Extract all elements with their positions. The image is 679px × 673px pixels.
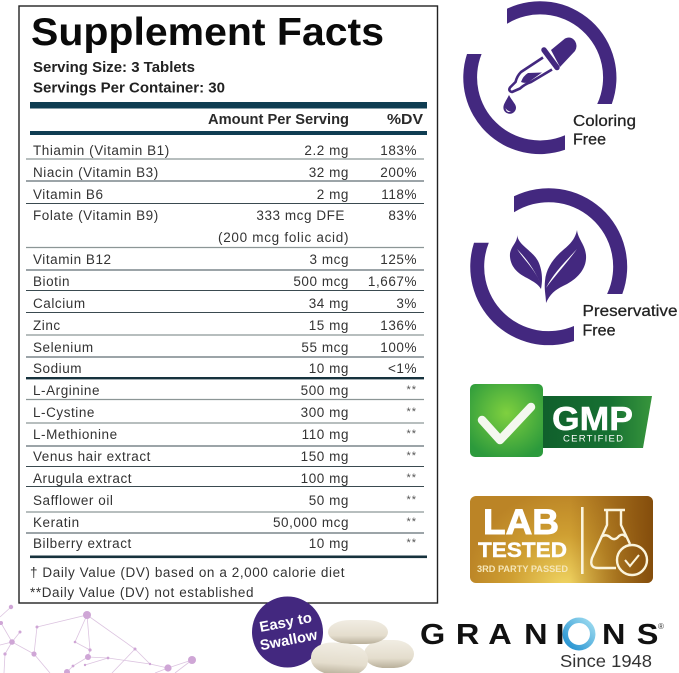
- footnotes: [30, 565, 345, 600]
- nutrient rows: Arugula extract: [33, 471, 132, 486]
- icon: coloring free ring: [463, 1, 616, 154]
- nutrient rows: 150 mg: [301, 449, 349, 464]
- nutrient rows: 10 mg: [309, 536, 349, 551]
- label: coloring free: Free: [573, 132, 606, 148]
- nutrient rows: **: [406, 537, 417, 549]
- nutrient rows: <1%: [388, 361, 417, 376]
- icon: tablets: [310, 620, 414, 673]
- nutrient rows: 118%: [381, 187, 417, 202]
- serving information: [33, 60, 225, 96]
- nutrient rows: (200 mcg folic acid): [218, 230, 349, 245]
- table header: %DV: [387, 112, 423, 128]
- nutrient rows: L-Arginine: [33, 383, 100, 398]
- nutrient rows: 100 mg: [301, 471, 349, 486]
- nutrient rows: 3 mcg: [309, 252, 349, 267]
- icon: leaves: [510, 230, 586, 303]
- nutrient rows: Zinc: [33, 318, 61, 333]
- row dividers: [26, 159, 427, 558]
- label: preservative free: Preservative: [582, 303, 678, 320]
- nutrient rows: **: [406, 450, 417, 462]
- icon: dropper: [503, 37, 576, 114]
- nutrient rows: [33, 143, 417, 551]
- logo: granions: [420, 618, 664, 671]
- nutrient rows: 32 mg: [309, 165, 349, 180]
- nutrient rows: L-Cystine: [33, 405, 95, 420]
- nutrient rows: 50 mg: [309, 493, 349, 508]
- nutrient rows: **: [406, 406, 417, 418]
- icon: preservative free ring: [470, 188, 627, 345]
- nutrient rows: Keratin: [33, 515, 80, 530]
- nutrient rows: 100%: [380, 340, 417, 355]
- nutrient rows: Vitamin B6: [33, 187, 104, 202]
- nutrient rows: 2 mg: [317, 187, 349, 202]
- nutrient rows: 500 mcg: [293, 274, 349, 289]
- logo: granions: Since 1948: [560, 651, 652, 671]
- icon: flask: [591, 510, 647, 575]
- label: coloring free: Coloring: [573, 113, 636, 130]
- nutrient rows: Niacin (Vitamin B3): [33, 165, 159, 180]
- nutrient rows: **: [406, 516, 417, 528]
- nutrient rows: 125%: [380, 252, 417, 267]
- nutrient rows: **: [406, 428, 417, 440]
- badge: GMP certified: CERTIFIED: [563, 434, 623, 444]
- nutrient rows: 500 mg: [301, 383, 349, 398]
- nutrient rows: Bilberry extract: [33, 536, 132, 551]
- badge: easy to swallow: Easy to: [258, 610, 313, 636]
- nutrient rows: Vitamin B12: [33, 252, 112, 267]
- badge: lab tested: 3RD PARTY PASSED: [477, 564, 568, 574]
- logo: granions: NS: [602, 618, 658, 651]
- footnotes: **Daily Value (DV) not established: [30, 585, 254, 600]
- nutrient rows: 15 mg: [309, 318, 349, 333]
- nutrient rows: Folate (Vitamin B9): [33, 208, 159, 223]
- decorative molecule network: [0, 605, 196, 673]
- nutrient rows: 2.2 mg: [304, 143, 349, 158]
- nutrient rows: Safflower oil: [33, 493, 113, 508]
- nutrient rows: 3%: [396, 296, 417, 311]
- panel: supplement facts: [19, 6, 438, 603]
- logo: granions: ®: [658, 622, 664, 631]
- nutrient rows: 183%: [380, 143, 417, 158]
- table header: [30, 102, 427, 135]
- nutrient rows: 333 mcg DFE: [256, 208, 345, 223]
- badge: easy to swallow: [252, 596, 323, 668]
- nutrient rows: 83%: [388, 208, 417, 223]
- logo: granions: GRANI: [420, 618, 565, 651]
- nutrient rows: **: [406, 494, 417, 506]
- badge: GMP certified: [470, 384, 652, 457]
- badge: lab tested: [470, 496, 653, 583]
- nutrient rows: **: [406, 384, 417, 396]
- nutrient rows: 200%: [380, 165, 417, 180]
- nutrient rows: 1,667%: [368, 274, 417, 289]
- nutrient rows: Venus hair extract: [33, 449, 151, 464]
- nutrient rows: 300 mg: [301, 405, 349, 420]
- nutrient rows: 55 mcg: [301, 340, 349, 355]
- nutrient rows: **: [406, 472, 417, 484]
- nutrient rows: Calcium: [33, 296, 86, 311]
- label: preservative free: Free: [582, 322, 616, 340]
- label: coloring free: [573, 113, 636, 148]
- nutrient rows: 10 mg: [309, 361, 349, 376]
- table header: Amount Per Serving: [208, 112, 349, 128]
- badge: GMP certified: GMP: [552, 401, 633, 438]
- badge: lab tested: TESTED: [478, 539, 567, 562]
- nutrient rows: 50,000 mcg: [273, 515, 349, 530]
- badge: lab tested: LAB: [483, 503, 559, 542]
- serving information: Servings Per Container: 30: [33, 80, 225, 96]
- nutrient rows: 136%: [380, 318, 417, 333]
- nutrient rows: Selenium: [33, 340, 94, 355]
- footnotes: † Daily Value (DV) based on a 2,000 calorie diet: [30, 565, 345, 580]
- badge: easy to swallow: Swallow: [259, 627, 319, 654]
- nutrient rows: Thiamin (Vitamin B1): [33, 143, 170, 158]
- title: Supplement Facts: [31, 11, 384, 54]
- label: preservative free: [582, 303, 678, 340]
- nutrient rows: Biotin: [33, 274, 70, 289]
- nutrient rows: Sodium: [33, 361, 82, 376]
- icon: logo ring: [565, 620, 593, 648]
- nutrient rows: L-Methionine: [33, 427, 118, 442]
- nutrient rows: 34 mg: [309, 296, 349, 311]
- serving information: Serving Size: 3 Tablets: [33, 60, 195, 76]
- nutrient rows: 110 mg: [302, 427, 349, 442]
